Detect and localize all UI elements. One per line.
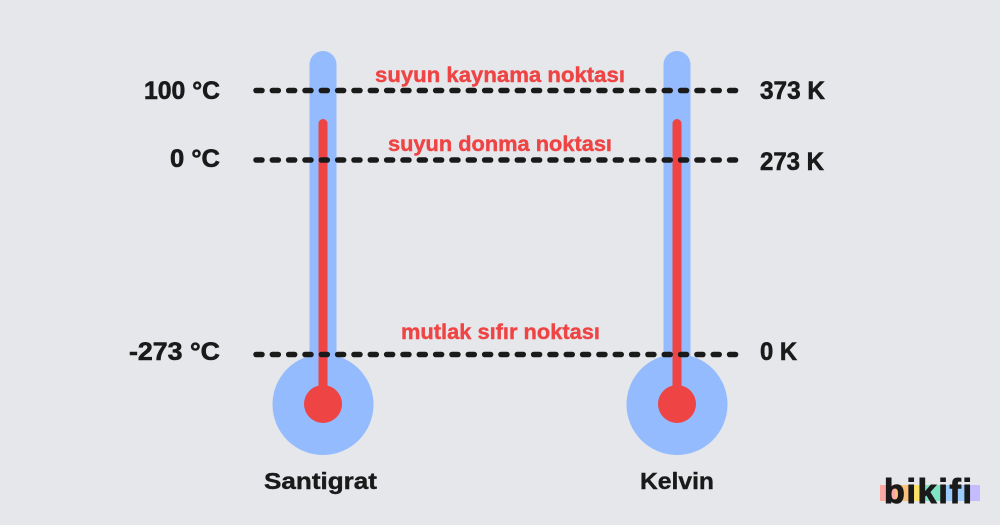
dashed line: freezing point [256,157,736,163]
label: -273 °C: -273 °C [129,338,220,366]
label: boiling point of water: suyun kaynama noktası [375,64,625,87]
label: 373 K: 373 K [760,77,825,105]
thermometer: Santigrat [272,51,374,455]
label: 100 °C: 100 °C [144,77,220,105]
thermometer: Kelvin [626,51,728,455]
label: 0 K: 0 K [760,338,797,366]
logo: bikifi: bikifi [884,473,972,511]
caption: Santigrat: Santigrat [264,468,377,494]
caption: Kelvin: Kelvin [640,468,714,494]
dashed line: boiling point [256,88,736,93]
label: 273 K: 273 K [760,148,824,176]
label: 0 °C: 0 °C [170,145,220,173]
label: freezing point of water: suyun donma noktası [388,133,612,156]
dashed line: absolute zero [256,352,736,357]
label: absolute zero: mutlak sıfır noktası [401,321,600,344]
